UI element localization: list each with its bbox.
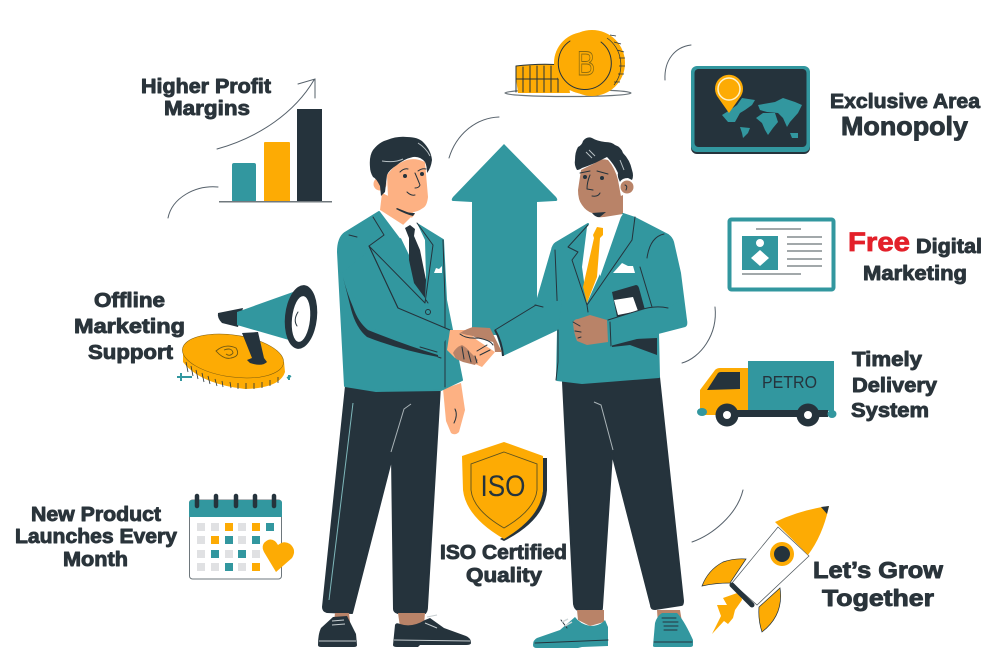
icon: world map: [691, 66, 810, 154]
right man book page: [614, 297, 638, 315]
heading: exclusive area monopoly: [830, 91, 981, 141]
left man lower hand: [443, 383, 465, 434]
panel: iso certified quality: [440, 442, 567, 587]
right man left shoe: [533, 617, 608, 648]
right man sleeve: [495, 300, 562, 356]
left man lapels: [369, 217, 445, 387]
heading: higher profit margins: [141, 76, 271, 120]
right man arm shadow: [612, 338, 657, 355]
right man tie: [583, 227, 603, 303]
left man right shoe: [393, 618, 471, 647]
right man shirt: [582, 214, 623, 303]
heading: higher profit margins: Higher Profit: [141, 76, 271, 98]
left man jacket: [338, 212, 462, 391]
icon: gold coins: [505, 30, 631, 96]
heading: timely delivery system: Delivery: [852, 375, 938, 397]
left man facial features: [382, 169, 426, 216]
heading: new product launches every month: [15, 504, 178, 571]
left man left shoe: [318, 616, 357, 647]
heading: offline marketing support: Support: [88, 342, 173, 364]
figure: left businessman: [318, 137, 471, 647]
heading: free digital marketing: [848, 227, 982, 285]
left man hair: [370, 137, 432, 196]
icon: delivery truck: PETRO: [762, 372, 817, 392]
left man ankles: [334, 613, 425, 627]
handshake: [447, 327, 502, 367]
right man neck: [592, 195, 623, 218]
right man right shoe: [653, 613, 693, 647]
figure: right businessman: [495, 137, 693, 648]
coin letter: B: [577, 45, 595, 83]
heading: offline marketing support: [74, 290, 185, 364]
right man pocket square: [613, 263, 635, 273]
arc: truck connector: [682, 307, 715, 363]
arc: coins connector: [449, 117, 499, 158]
panel: new product launches: [15, 496, 294, 579]
left man face: [387, 159, 428, 212]
heading: free digital marketing: Digital: [916, 236, 982, 258]
heading: new product launches every month: Month: [63, 549, 128, 571]
heading: higher profit margins: Margins: [164, 98, 250, 120]
right man forearm: [608, 300, 686, 346]
heading: iso certified quality: ISO Certified: [440, 542, 567, 564]
right man book: [612, 285, 645, 317]
left man sleeve: [342, 250, 450, 356]
icon: iso shield: [462, 442, 547, 541]
heading: new product launches every month: Launches Every: [15, 526, 178, 548]
right man fist: [573, 315, 608, 345]
left man pocket square: [434, 266, 442, 273]
heading: let's grow together: Together: [822, 585, 934, 611]
left man trousers: [323, 386, 440, 613]
heading: iso certified quality: Quality: [466, 565, 543, 587]
heading: free digital marketing: Free: [848, 227, 910, 257]
right man lapels: [555, 217, 664, 323]
heading: free digital marketing: Marketing: [863, 263, 967, 285]
right man face: [578, 159, 622, 213]
right man trousers: [563, 377, 683, 611]
icon: iso shield: ISO: [480, 470, 526, 503]
panel: timely delivery system: [697, 349, 938, 426]
icon: megaphone on coin: [177, 284, 320, 389]
heading: timely delivery system: Timely: [852, 349, 923, 371]
right man hair: [575, 137, 633, 182]
panel: higher profit margins: [141, 76, 332, 202]
left man shirt: [380, 210, 426, 279]
left man neck: [380, 193, 415, 226]
panel: free digital marketing: [730, 220, 982, 290]
left man tie: [405, 225, 426, 298]
heading: iso certified quality: [440, 542, 567, 587]
central growth arrow: [452, 144, 557, 335]
heading: offline marketing support: Offline: [94, 290, 165, 312]
heading: exclusive area monopoly: Monopoly: [841, 111, 969, 141]
icon: bar chart: [219, 109, 332, 202]
icon: calendar with heart: [189, 496, 294, 579]
arrow: growth trend: [217, 79, 315, 149]
icon: rocket: [702, 506, 829, 634]
right man ankles: [577, 610, 682, 626]
panel: offline marketing support: [74, 284, 320, 389]
panel: exclusive area monopoly: [691, 66, 981, 154]
panel: let's grow together: [702, 506, 943, 634]
heading: let's grow together: Let’s Grow: [813, 557, 943, 583]
arc: rocket connector: [692, 490, 743, 542]
heading: offline marketing support: Marketing: [74, 316, 185, 338]
arc: map connector: [665, 45, 691, 80]
heading: exclusive area monopoly: Exclusive Area: [830, 91, 981, 113]
left man sleeve shadow: [343, 277, 438, 357]
heading: let's grow together: [813, 557, 943, 611]
icon: digital listing card: [730, 220, 834, 290]
icon: delivery truck: [697, 361, 836, 426]
arc: chart connector: [168, 187, 218, 218]
heading: timely delivery system: [851, 349, 938, 422]
right man jacket: [536, 214, 686, 383]
right man facial features: [580, 171, 627, 217]
heading: timely delivery system: System: [851, 400, 929, 422]
heading: new product launches every month: New Product: [31, 504, 161, 526]
